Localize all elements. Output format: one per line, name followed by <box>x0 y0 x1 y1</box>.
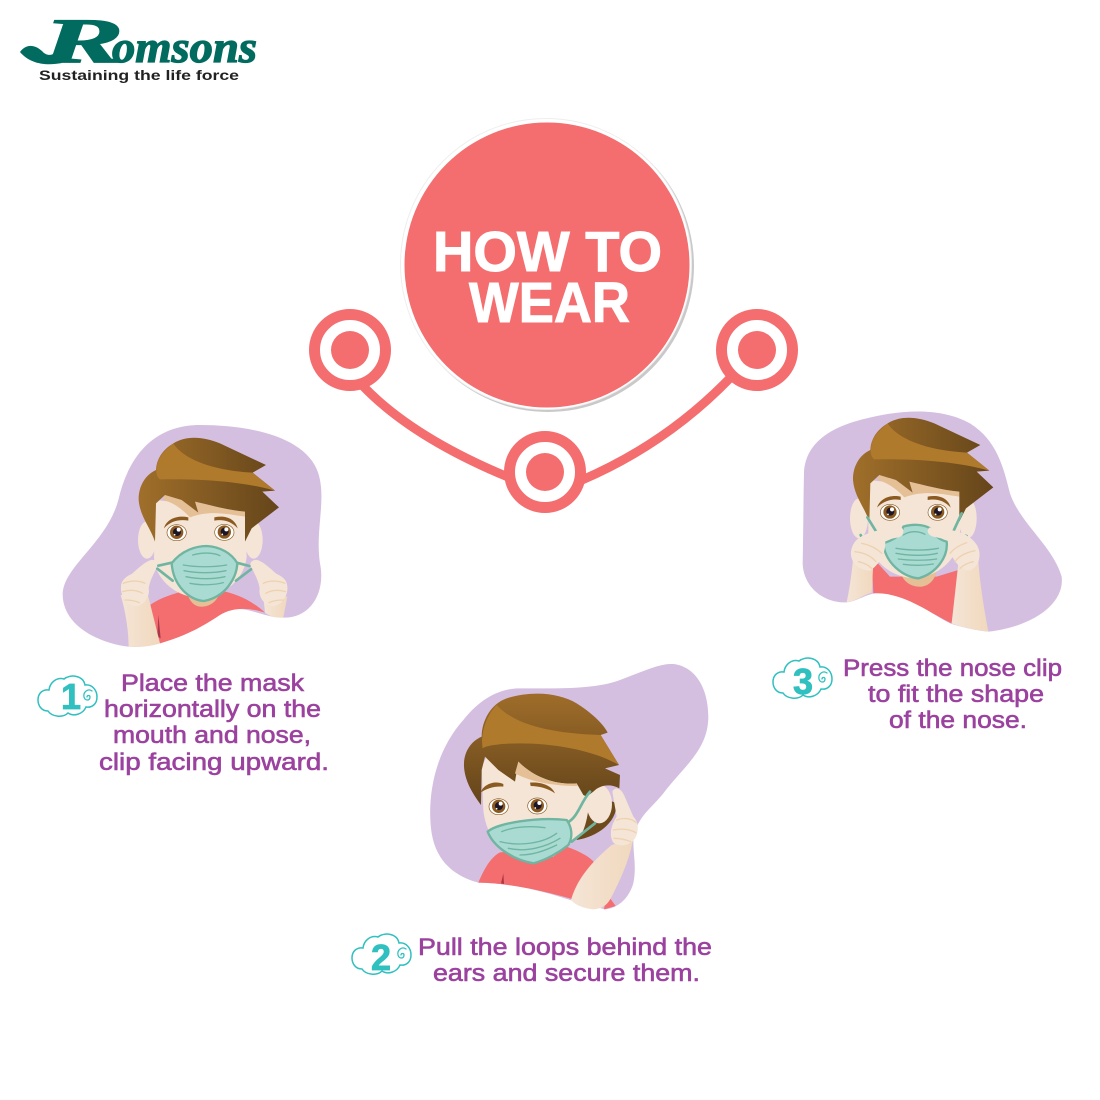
arm <box>571 838 633 909</box>
title text: HOW TO <box>433 220 662 284</box>
node left <box>314 314 386 386</box>
mask <box>883 525 947 578</box>
connector arc right <box>582 376 732 480</box>
logo: Romsons <box>20 5 257 83</box>
step 1 number badge <box>38 676 97 717</box>
step 3 text: to fit the shape <box>868 681 1044 708</box>
neck shadow <box>187 590 220 607</box>
step 3 text: Press the nose clip <box>843 655 1062 682</box>
face <box>482 757 590 860</box>
face <box>154 500 247 598</box>
eyes <box>489 798 547 815</box>
step 1 text: Place the mask <box>121 670 305 697</box>
cloud <box>773 658 832 698</box>
eyebrows <box>877 496 951 508</box>
logo tagline: Sustaining the life force <box>39 67 239 83</box>
eyes <box>880 504 947 520</box>
step 2 text: Pull the loops behind the <box>418 934 712 961</box>
pleats <box>500 827 560 855</box>
forehead shadow <box>877 475 959 497</box>
blob <box>430 664 708 909</box>
step 3 number badge <box>773 658 832 702</box>
straps <box>157 563 251 581</box>
step 1 text: clip facing upward. <box>99 749 329 776</box>
eyebrows <box>164 517 238 528</box>
ears <box>138 521 263 559</box>
step 2 text: ears and secure them. <box>433 960 700 987</box>
step 2 number badge <box>352 934 411 978</box>
node right <box>722 314 792 386</box>
neck shadow <box>900 572 937 587</box>
number: 3 <box>793 661 813 702</box>
straps <box>567 792 595 842</box>
hair <box>464 694 620 805</box>
ear <box>587 785 612 823</box>
forehead shadow <box>163 495 245 517</box>
mask <box>172 546 237 601</box>
shirt <box>872 557 958 623</box>
arm left <box>847 557 873 602</box>
swirl <box>84 690 92 700</box>
logo swoosh <box>20 46 62 64</box>
illustration: step 1 boy placing mask <box>63 425 321 647</box>
hand left <box>851 528 903 571</box>
illustration: step 2 boy securing ear loops <box>430 664 708 909</box>
swirl <box>819 672 827 682</box>
pleats <box>183 553 227 585</box>
straps <box>861 513 967 537</box>
circle shadow <box>402 120 694 412</box>
eyes <box>167 524 234 541</box>
hand left <box>121 560 158 606</box>
logo wordmark: omsons <box>112 23 257 72</box>
shirt <box>144 591 265 643</box>
logo wordmark: R <box>40 5 124 76</box>
node bottom <box>510 436 580 508</box>
blob <box>803 411 1062 632</box>
blob <box>63 425 321 647</box>
title text: WEAR <box>469 271 630 335</box>
cloud <box>352 934 411 974</box>
connector with three nodes <box>314 314 792 508</box>
arm left <box>121 595 160 647</box>
illustration: step 3 boy pressing nose clip <box>803 411 1062 632</box>
shirt <box>478 847 595 899</box>
hand right <box>928 528 980 571</box>
circle fill <box>404 122 690 408</box>
arm right <box>952 560 988 632</box>
step 1 text: mouth and nose, <box>113 722 311 749</box>
arm right <box>263 597 287 618</box>
mask <box>488 819 571 863</box>
ears <box>850 498 977 538</box>
hair behind ear <box>577 793 617 840</box>
circle halo <box>400 118 692 410</box>
number: 1 <box>61 676 81 717</box>
step 1 text: horizontally on the <box>104 696 321 723</box>
eyebrows <box>481 782 555 793</box>
face <box>868 480 960 578</box>
hand right <box>250 560 287 606</box>
title circle <box>400 118 694 412</box>
step 3 text: of the nose. <box>889 707 1027 734</box>
hand <box>611 788 638 845</box>
cloud <box>38 676 97 716</box>
swirl <box>398 948 406 958</box>
connector arc left <box>362 385 508 477</box>
number: 2 <box>371 937 391 978</box>
pleats <box>896 532 938 565</box>
